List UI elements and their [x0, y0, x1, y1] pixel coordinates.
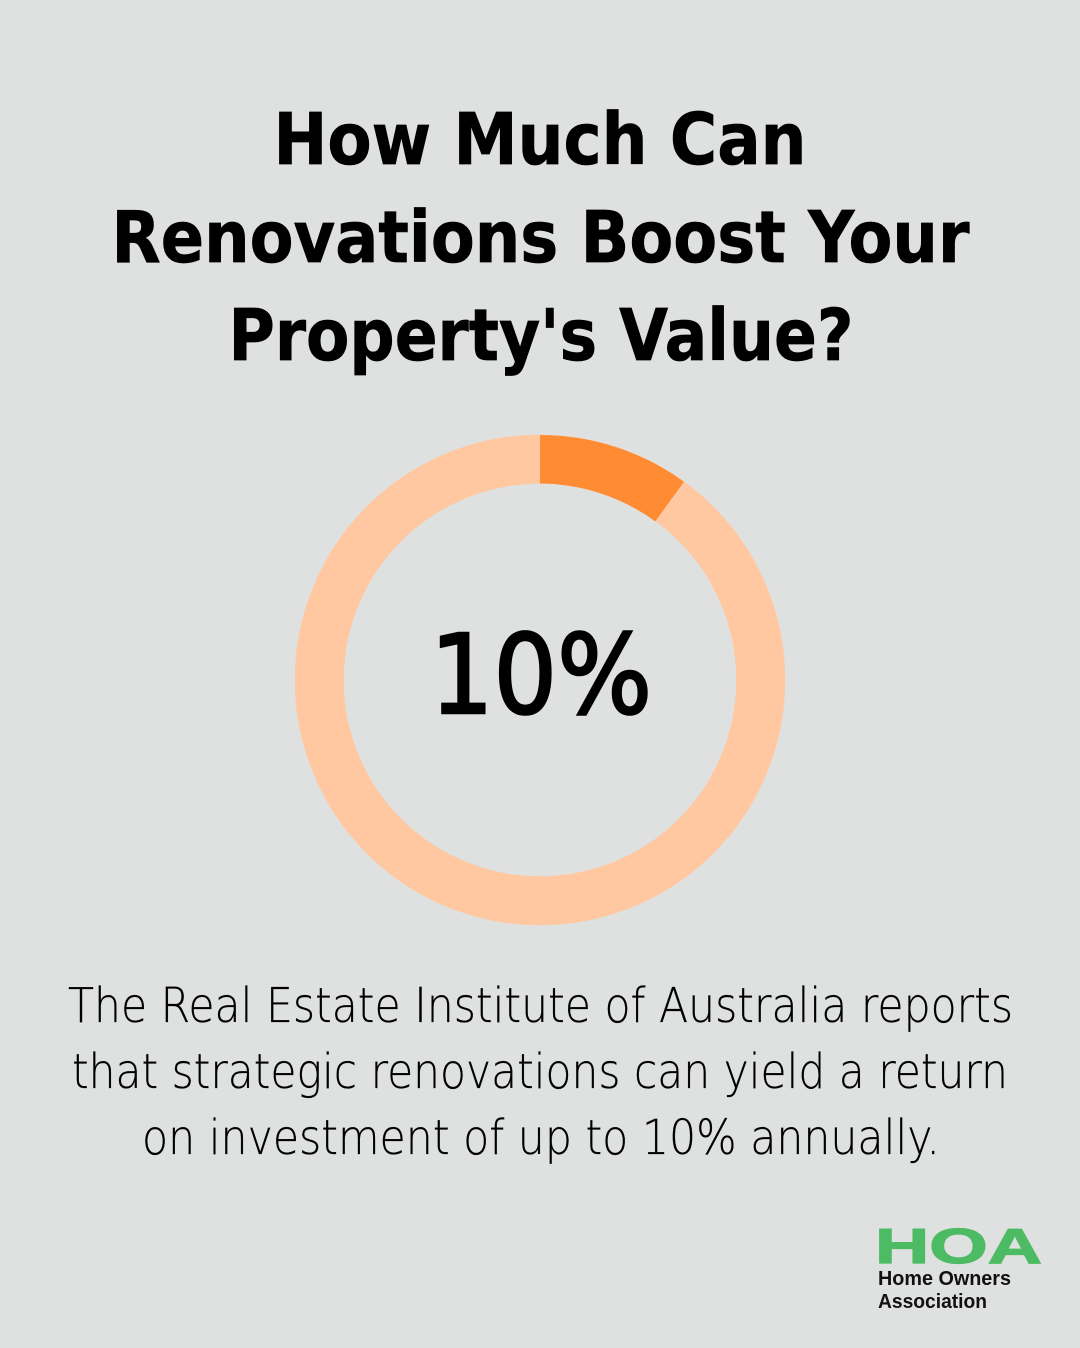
logo name: Association: [878, 1291, 987, 1313]
description text: on investment of up to 10% annually.: [142, 1110, 940, 1166]
logo name: [878, 1268, 1011, 1313]
donut chart: 10%: [319, 435, 761, 901]
donut centre value: 10%: [430, 611, 652, 739]
logo wordmark: HOA: [875, 1220, 1042, 1274]
title: Property's Value?: [228, 294, 854, 377]
title: Renovations Boost Your: [112, 196, 970, 279]
description text: [68, 978, 1013, 1166]
title: How Much Can: [274, 98, 806, 181]
donut remainder ring: [319, 459, 761, 901]
donut highlighted segment: [540, 435, 684, 521]
title: [112, 98, 970, 377]
logo name: Home Owners: [878, 1268, 1011, 1290]
logo: Home Owners Association: [875, 1220, 1042, 1313]
